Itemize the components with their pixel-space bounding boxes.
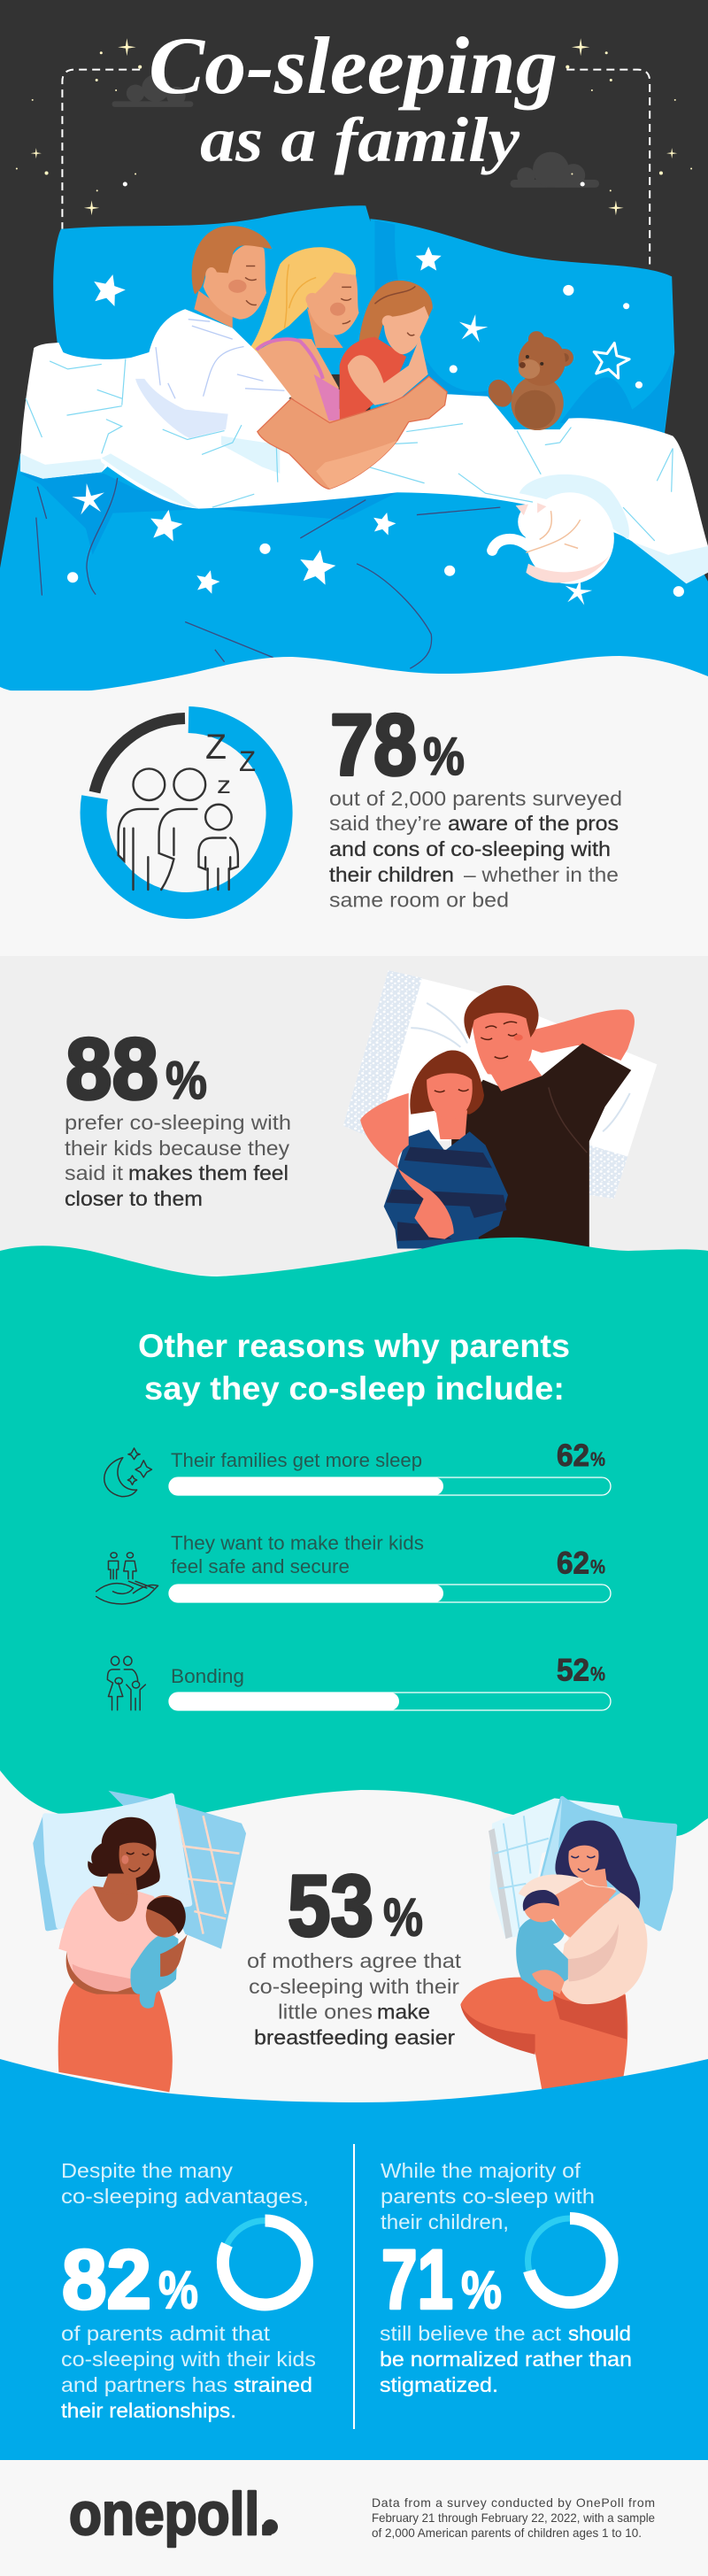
- sleep letters: Z: [239, 745, 256, 777]
- number 82 percent: [62, 2233, 198, 2326]
- heading: other reasons: Other reasons why parents: [138, 1328, 570, 1364]
- text: 78 percent description: aware of the pros: [448, 812, 619, 835]
- text: 78 percent description: [329, 787, 622, 912]
- number 88 percent: %: [165, 1051, 207, 1110]
- front pillow: [35, 1816, 61, 1929]
- father's arm around child: [360, 1093, 454, 1239]
- mother: [58, 1982, 173, 2092]
- text: 78 percent description: their children: [329, 863, 454, 886]
- icon: moon and stars: [104, 1448, 151, 1497]
- label: feel safe and secure: [171, 1555, 350, 1577]
- text: lead-in: Despite the many: [61, 2159, 234, 2182]
- text: lead-in: co-sleeping advantages,: [61, 2185, 309, 2208]
- text: 71 percent description: [380, 2322, 632, 2396]
- bar: [169, 1693, 611, 1710]
- dashed frame: [62, 70, 650, 264]
- ring chart: 71 percent: [527, 2218, 612, 2302]
- pillows and sheets: [53, 205, 377, 374]
- text: 78 percent description: and cons of co-sleeping with: [329, 837, 611, 860]
- row: more sleep: [104, 1438, 611, 1497]
- ring chart: 82 percent: [223, 2220, 307, 2305]
- teddy bear: [484, 331, 573, 430]
- stars and dots on the sheets: [67, 247, 684, 605]
- panel: 78 percent stat: [94, 696, 622, 912]
- text: 53 percent stat: [247, 1857, 461, 2048]
- description: [247, 1949, 461, 2048]
- cat: [492, 492, 614, 584]
- panel: 82 percent stat: [61, 2159, 316, 2422]
- source note: of 2,000 American parents of children ages 1 to 10.: [372, 2526, 642, 2540]
- text: lead-in: While the majority of: [381, 2159, 581, 2182]
- label: Bonding: [171, 1665, 244, 1687]
- illustration: family in bed: [0, 38, 708, 690]
- text: 88 percent description: [65, 1111, 291, 1210]
- description: co-sleeping with their: [249, 1975, 459, 1998]
- panel: blue section: [0, 2059, 708, 2460]
- man: [135, 226, 447, 489]
- girl: [340, 281, 433, 423]
- number 53 percent: %: [383, 1887, 423, 1947]
- value: 62 percent: 62: [557, 1438, 589, 1473]
- clouds: [112, 74, 599, 188]
- label: Their families get more sleep: [171, 1449, 422, 1471]
- panel: 71 percent stat: [380, 2159, 632, 2396]
- bar: [169, 1585, 611, 1602]
- source note: February 21 through February 22, 2022, with a sample: [372, 2510, 655, 2525]
- label: They want to make their kids: [171, 1531, 424, 1554]
- text: 88 percent description: said it: [65, 1161, 124, 1184]
- plaid pillow: [108, 1791, 246, 1949]
- text: lead-in: their children,: [381, 2210, 509, 2233]
- panel: other reasons: [0, 1238, 708, 1837]
- sleep letters: [205, 728, 256, 798]
- illustration: mother breastfeeding: [460, 1798, 675, 2090]
- text: 71 percent description: still believe the act: [380, 2322, 562, 2345]
- title: as a family: [200, 104, 520, 175]
- text: 88 percent description: closer to them: [65, 1187, 203, 1210]
- baby: [130, 1932, 179, 2009]
- blue pillow: [542, 1798, 675, 1929]
- icon: family group: [107, 1656, 145, 1710]
- value: 52 percent: 52: [557, 1654, 589, 1687]
- heading: other reasons: say they co-sleep include:: [144, 1370, 565, 1407]
- value: 52 percent: %: [590, 1662, 605, 1685]
- logo: onepoll: onepoll.: [69, 2480, 274, 2548]
- text: 82 percent description: and partners has: [61, 2373, 227, 2396]
- sparkles: [16, 38, 692, 215]
- number 82 percent: %: [158, 2261, 198, 2319]
- text: lead-in: [381, 2159, 595, 2233]
- panel: 88 percent stat: [0, 956, 708, 1275]
- number 82 percent: 82: [62, 2233, 151, 2326]
- text: 78 percent description: same room or bed: [329, 889, 509, 912]
- plaid pillow: [490, 1798, 623, 1939]
- value: 62 percent: 62: [557, 1546, 589, 1581]
- divider: [353, 2144, 355, 2429]
- value: 62 percent: %: [590, 1556, 605, 1577]
- illustration: mother holding baby: [35, 1791, 246, 2092]
- text: 82 percent description: co-sleeping with their kids: [61, 2348, 316, 2371]
- child: [410, 1050, 484, 1114]
- number 53 percent: 53: [288, 1857, 373, 1955]
- panel: night sky background: [0, 0, 708, 690]
- title: Co-sleeping: [149, 20, 558, 111]
- pillow: [343, 970, 657, 1199]
- number 88 percent: 88: [65, 1020, 158, 1117]
- description: of mothers agree that: [247, 1949, 461, 1972]
- label: [171, 1531, 424, 1577]
- text: 71 percent description: stigmatized.: [380, 2373, 498, 2396]
- text: lead-in: [61, 2159, 309, 2208]
- text: 82 percent description: of parents admit that: [61, 2322, 271, 2345]
- number 78 percent: 78: [330, 696, 417, 793]
- text: 88 percent description: makes them feel: [128, 1161, 289, 1184]
- number 71 percent: %: [461, 2261, 502, 2319]
- number 88 percent: [65, 1020, 207, 1117]
- father: [530, 1009, 635, 1060]
- text: 88 percent description: their kids because they: [65, 1137, 289, 1160]
- mother: [460, 1978, 627, 2090]
- row: safe and secure: [96, 1531, 611, 1604]
- text: 78 percent description: out of 2,000 parents surveyed: [329, 787, 622, 810]
- text: 71 percent description: be normalized rather than: [380, 2348, 632, 2371]
- icon: sleeping family: [119, 768, 238, 890]
- description: breastfeeding easier: [254, 2025, 455, 2048]
- text: 78 percent description: – whether in the: [464, 863, 619, 886]
- number 78 percent: %: [423, 727, 465, 786]
- illustration: father and child sleeping: [343, 970, 657, 1253]
- text: 71 percent description: should: [568, 2322, 631, 2345]
- source note: Data from a survey conducted by OnePoll from: [372, 2495, 655, 2510]
- sleep letters: z: [217, 771, 231, 798]
- value: 62 percent: %: [590, 1448, 605, 1470]
- text: 88 percent description: prefer co-sleeping with: [65, 1111, 291, 1134]
- sheet creases: [36, 478, 500, 668]
- woman: [249, 247, 359, 423]
- row: bonding: [107, 1654, 611, 1710]
- text: 82 percent description: their relationships.: [61, 2399, 236, 2422]
- number 71 percent: 71: [381, 2233, 453, 2326]
- icon: figures on a hand: [96, 1553, 158, 1604]
- baby: [516, 1917, 568, 2001]
- panel: light background with top wave: [0, 656, 708, 958]
- footer background: [0, 2460, 708, 2576]
- heading: other reasons: [138, 1328, 570, 1407]
- title: [149, 20, 558, 175]
- ring chart: 78 percent: [94, 719, 280, 906]
- text: 82 percent description: [61, 2322, 316, 2422]
- sleep letters: Z: [205, 728, 227, 767]
- text: lead-in: parents co-sleep with: [381, 2185, 595, 2208]
- white duvet: [20, 343, 149, 479]
- description: little ones: [278, 2001, 373, 2024]
- description: make: [377, 2001, 430, 2024]
- text: 78 percent description: said they’re: [329, 812, 442, 835]
- source note: [372, 2495, 655, 2540]
- bar: [169, 1477, 611, 1495]
- text: 82 percent description: strained: [234, 2373, 312, 2396]
